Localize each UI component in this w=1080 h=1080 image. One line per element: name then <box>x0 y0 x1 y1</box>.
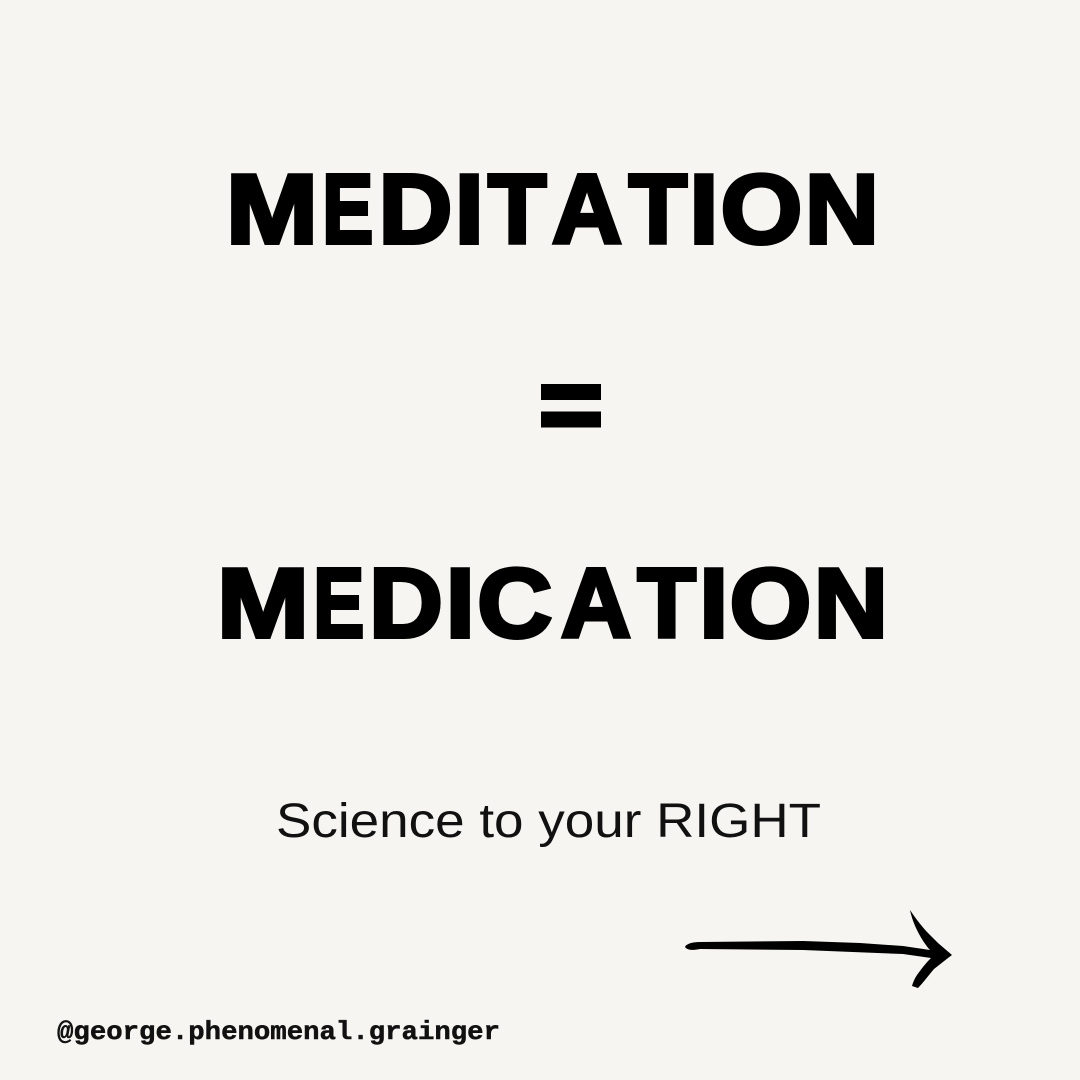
heading: medication: C <box>477 548 552 658</box>
heading: medication: I <box>699 548 728 658</box>
heading: medication: A <box>561 548 631 658</box>
heading: meditation: M <box>226 154 318 264</box>
subtitle: Science to your RIGHT <box>276 795 821 848</box>
heading: meditation: D <box>379 154 452 264</box>
heading: meditation: I <box>689 154 718 264</box>
heading: meditation: O <box>721 154 802 264</box>
heading: medication: D <box>369 548 443 658</box>
heading: meditation: N <box>805 154 879 264</box>
icon: equals sign <box>541 384 601 428</box>
heading: medication: N <box>814 548 888 658</box>
heading: medication: I <box>446 548 475 658</box>
heading: meditation: T <box>629 154 687 264</box>
arrow <box>685 910 952 988</box>
heading: medication: O <box>730 548 811 658</box>
heading: meditation: E <box>322 154 373 264</box>
heading: meditation: A <box>552 154 622 264</box>
heading: meditation: I <box>455 154 484 264</box>
heading: medication: M <box>217 548 309 658</box>
heading: meditation: T <box>488 154 546 264</box>
handle: @george.phenomenal.grainger <box>57 1017 500 1047</box>
heading: medication: T <box>638 548 696 658</box>
heading: medication: E <box>313 548 364 658</box>
